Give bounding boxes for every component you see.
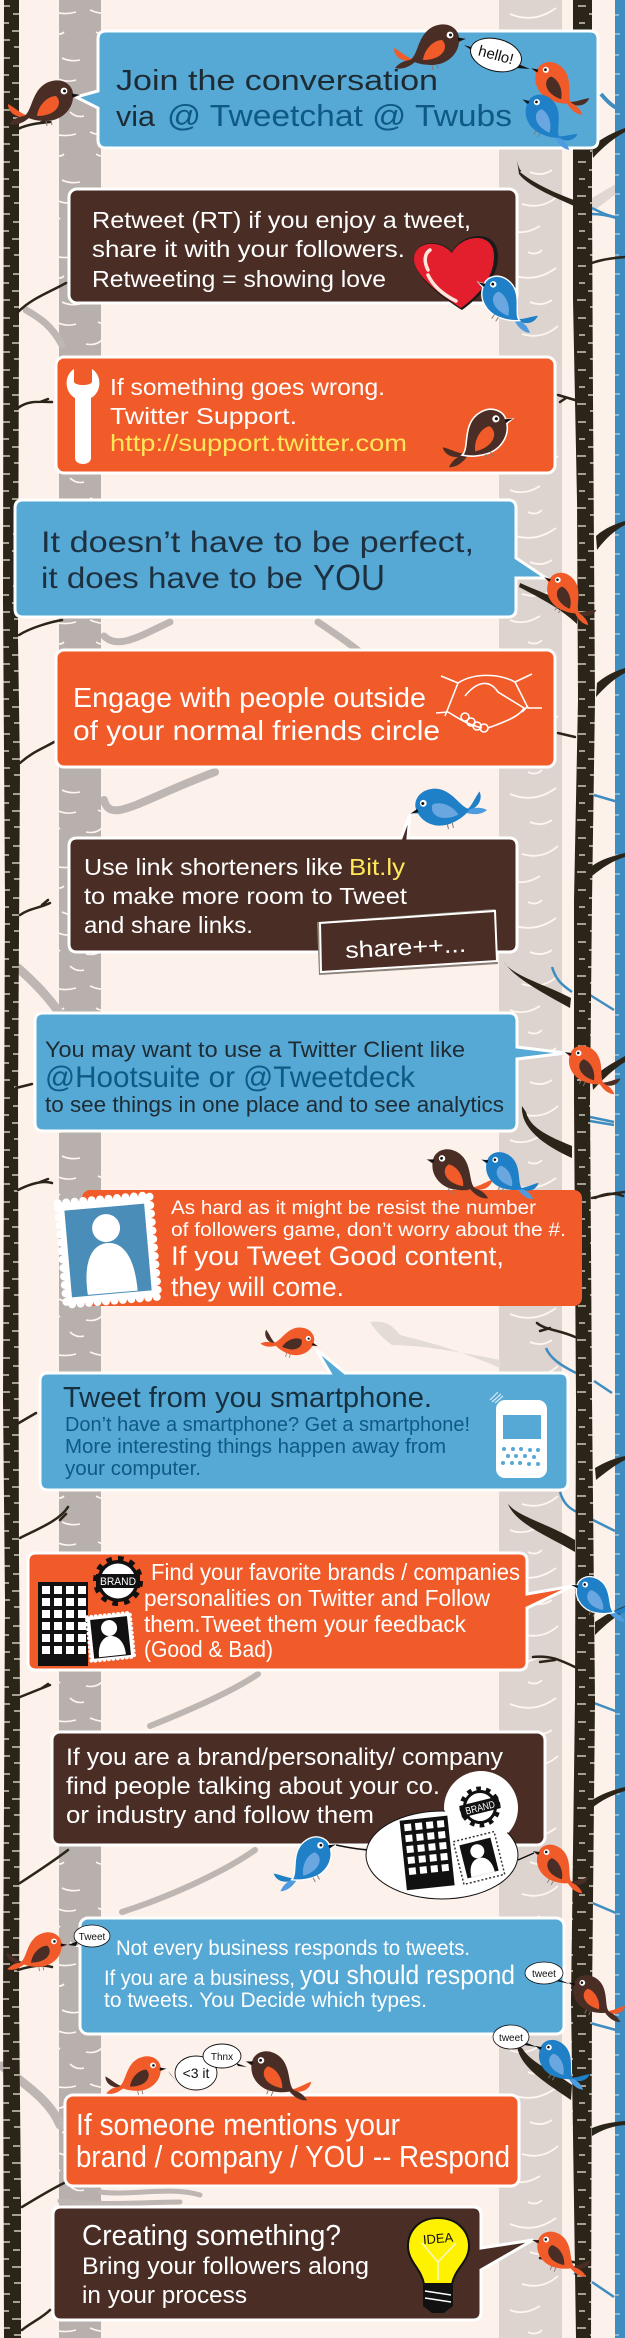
speech bubble: thnx: Thnx [211, 2052, 233, 2063]
text: personalities on Twitter and Follow [144, 1585, 490, 1611]
text: As hard as it might be resist the number [171, 1198, 537, 1219]
box [69, 189, 517, 303]
speech cloud [336, 1771, 534, 1899]
text: Retweeting = showing love [92, 266, 386, 292]
text: to make more room to Tweet [84, 883, 408, 909]
icon: light bulb: IDEA [422, 2230, 454, 2247]
text: Not every business responds to tweets. [116, 1937, 470, 1960]
text: to tweets. You Decide which types. [104, 1989, 427, 2012]
panel: retweet [69, 189, 546, 335]
icon: brand badge [96, 1559, 140, 1603]
bubble with right tail [53, 2207, 533, 2320]
bird: orange [533, 566, 605, 627]
speech bubble: tweet lower: tweet [499, 2033, 523, 2044]
panel: mentions respond [65, 2044, 519, 2186]
heading text [116, 65, 512, 133]
text [73, 682, 440, 746]
bird: orange [522, 56, 597, 117]
speech bubble: Tweet left: Tweet [79, 1932, 106, 1943]
bird: brown on left branch [8, 80, 80, 126]
bird: orange left [6, 1932, 68, 1971]
icon: wrench [67, 369, 99, 464]
text: share it with your followers. [92, 236, 405, 262]
tree: dark right trunk [571, 0, 595, 2338]
text [110, 374, 407, 456]
heading text: @ Tweetchat @ Twubs [167, 98, 512, 133]
text: Creating something? [82, 2220, 341, 2252]
text [92, 207, 471, 292]
speech bubble: Tweet left [68, 1925, 110, 1947]
icon: brand badge: BRAND [100, 1576, 136, 1588]
text: Use link shorteners like [84, 854, 343, 880]
background tree: grey left [2, 0, 360, 2338]
text: http://support.twitter.com [110, 430, 407, 456]
icon: light bulb [408, 2218, 469, 2313]
bubble with right tail [15, 500, 546, 617]
speech bubble: love it [168, 2056, 217, 2090]
text: More interesting things happen away from [65, 1436, 446, 1458]
bird: orange [556, 1040, 625, 1096]
bubble with right tail [35, 1013, 566, 1131]
box [65, 2095, 519, 2186]
tag: share++: share++... [345, 931, 467, 963]
box [80, 1918, 564, 2034]
panel: engage [56, 650, 555, 767]
bird: blue lower right [526, 2034, 597, 2092]
bird: blue [474, 1148, 544, 1201]
panel: twitter client [35, 1013, 625, 1131]
text [82, 2220, 369, 2309]
text: them.Tweet them your feedback [144, 1611, 466, 1637]
text: It doesn’t have to be perfect, [41, 526, 474, 559]
icon: brand badge: BRAND [464, 1799, 496, 1817]
text: you should respond [300, 1960, 515, 1990]
icon: stamp person [87, 1613, 134, 1661]
icon: heart [414, 236, 498, 310]
text: (Good & Bad) [144, 1636, 273, 1662]
bird: brown [421, 1146, 496, 1200]
text: Don’t have a smartphone? Get a smartphone! [65, 1414, 470, 1436]
panel: twitter support [56, 357, 555, 473]
box [56, 357, 555, 473]
speech bubble: hello: hello! [476, 43, 515, 68]
bird: blue [566, 1573, 625, 1624]
bird: orange [259, 1314, 323, 1367]
text: Twitter Support. [110, 403, 297, 429]
text: of followers game, don’t worry about the #. [171, 1220, 566, 1241]
icon: building [38, 1582, 88, 1666]
bird: blue [511, 87, 587, 152]
text [104, 1937, 515, 2012]
text [45, 1037, 504, 1117]
icon: handshake [436, 674, 542, 732]
text: and share links. [84, 912, 253, 938]
icon: stamp person [453, 1832, 505, 1884]
text: in your process [82, 2282, 247, 2309]
bubble with left tail [76, 31, 598, 148]
icon: phone [490, 1392, 547, 1478]
text: Bring your followers along [82, 2253, 369, 2280]
bird: brown right [561, 1971, 625, 2024]
text: @Hootsuite or @Tweetdeck [45, 1061, 416, 1094]
text: Retweet (RT) if you enjoy a tweet, [92, 207, 471, 233]
text: Bit.ly [349, 854, 406, 880]
text [144, 1559, 520, 1662]
text: If you are a brand/personality/ company [66, 1744, 503, 1771]
text: your computer. [65, 1458, 201, 1480]
text [66, 1744, 503, 1829]
icon: building [400, 1816, 455, 1890]
tag: share++ [317, 909, 498, 975]
bird: blue [467, 269, 546, 335]
bird: orange [105, 2056, 167, 2095]
box [52, 1732, 545, 1845]
text: You may want to use a Twitter Client like [45, 1037, 465, 1062]
speech bubble: tweet right [525, 1962, 570, 1984]
background tree: grey right [370, 0, 616, 2338]
bird: orange [524, 1839, 595, 1895]
text [171, 1198, 566, 1302]
box [56, 650, 555, 767]
text: find people talking about your co. [66, 1773, 440, 1800]
text [84, 854, 408, 938]
panel: join the conversation [76, 24, 598, 152]
text [76, 2107, 510, 2174]
panel: link shorteners [69, 770, 517, 975]
bubble with top tail [69, 814, 517, 952]
bubble with top tail [40, 1349, 568, 1490]
bird: brown outlined [436, 404, 522, 470]
text: Find your favorite brands / companies [151, 1559, 520, 1585]
icon: stamp profile [58, 1195, 158, 1305]
icon: brand badge [456, 1785, 504, 1829]
text: If someone mentions your [76, 2107, 400, 2142]
speech bubble: tweet right: tweet [532, 1969, 556, 1980]
text: they will come. [171, 1272, 344, 1302]
text: or industry and follow them [66, 1802, 374, 1829]
bird: brown [240, 2048, 315, 2102]
speech bubble: love it: <3 it [183, 2065, 210, 2081]
speech bubble: tweet lower [493, 2025, 537, 2049]
heading text: Join the conversation [116, 65, 438, 97]
text: If you are a business, [104, 1967, 295, 1990]
text: If something goes wrong. [110, 374, 385, 400]
text: to see things in one place and to see analytics [45, 1092, 504, 1117]
bird: blue [404, 770, 489, 842]
panel: smartphone [40, 1314, 568, 1490]
tree: dark left trunk [3, 0, 21, 2338]
box [82, 1190, 582, 1306]
text: If you Tweet Good content, [171, 1241, 504, 1271]
text: brand / company / YOU -- Respond [76, 2139, 510, 2174]
bird: orange [527, 2228, 595, 2279]
panel: creating something [53, 2207, 595, 2320]
panel: businesses respond [6, 1918, 625, 2092]
bird: brown [394, 24, 466, 70]
bird: blue [267, 1831, 345, 1893]
text [41, 526, 474, 598]
text: of your normal friends circle [73, 715, 440, 746]
text: YOU [313, 557, 385, 598]
text: Engage with people outside [73, 682, 426, 713]
text [63, 1382, 470, 1480]
text: it does have to be [41, 562, 303, 595]
panel: followers game [58, 1146, 582, 1306]
panel: favorite brands [28, 1553, 625, 1670]
speech bubble: thnx [203, 2044, 247, 2068]
text: Tweet from you smartphone. [63, 1382, 432, 1414]
bubble with right tail [28, 1553, 573, 1670]
tree: blue far right [546, 0, 625, 2338]
panel: brand personality [52, 1732, 595, 1899]
heading text: via [116, 101, 156, 133]
speech bubble: hello [464, 33, 530, 77]
panel: be you [15, 500, 605, 627]
